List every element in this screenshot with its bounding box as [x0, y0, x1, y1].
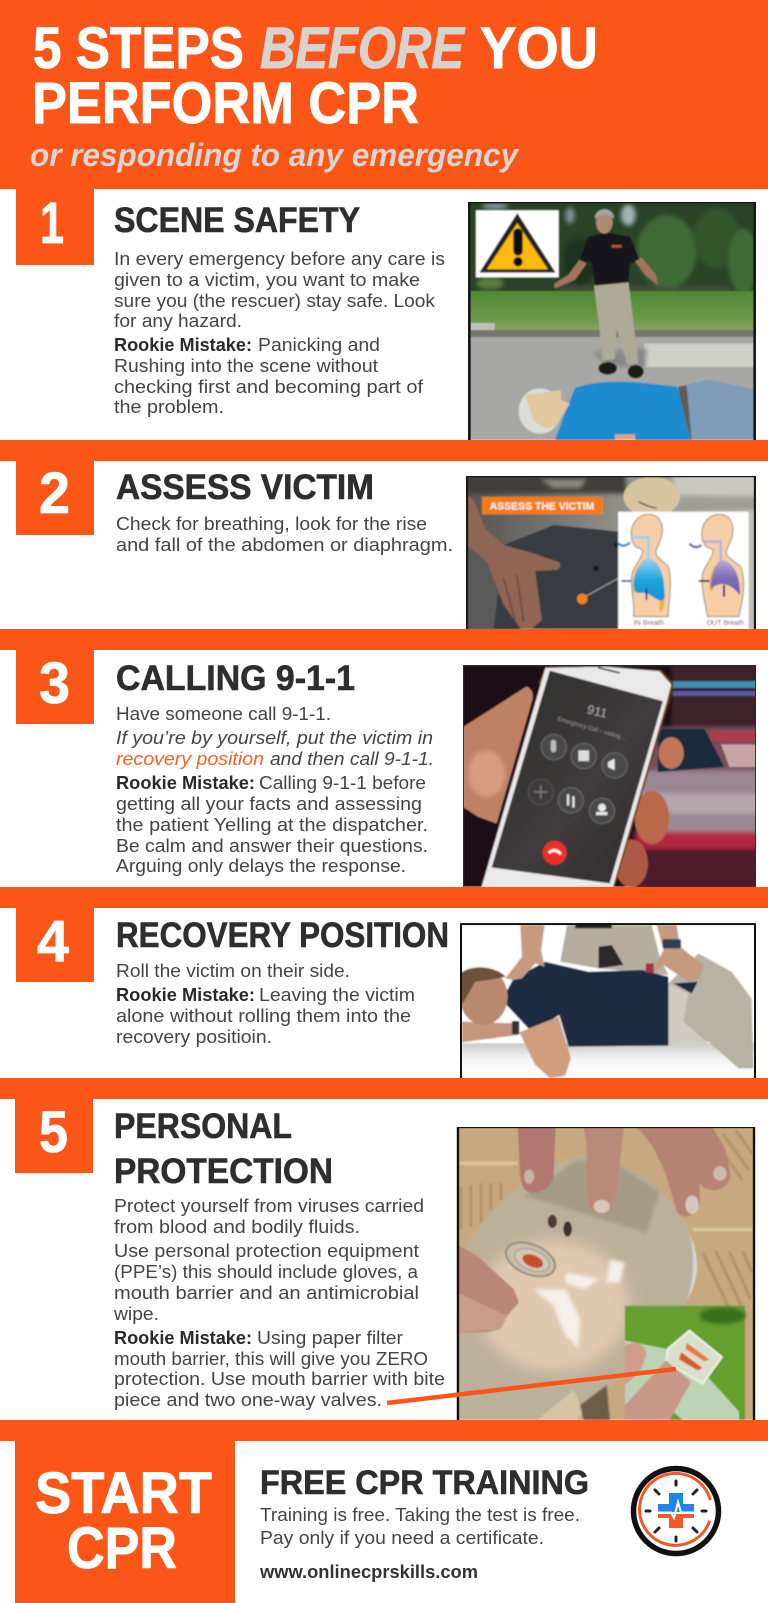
training text — [260, 1505, 580, 1548]
main title: YOU — [480, 16, 598, 81]
panel: step 3 calling 9-1-1 — [16, 650, 434, 876]
panel: step 2 assess victim — [16, 461, 453, 555]
training heading: FREE CPR TRAINING — [260, 1464, 589, 1502]
training text: Pay only if you need a certificate. — [260, 1528, 544, 1548]
panel: step 4 recovery position — [16, 908, 449, 1047]
body text: Rookie Mistake: — [116, 985, 255, 1005]
main title: BEFORE — [260, 16, 466, 81]
body text: Rookie Mistake: — [116, 773, 255, 793]
out breath diagram: OUT Breath — [707, 618, 744, 627]
rescuer — [554, 209, 658, 378]
panel: footer — [15, 1441, 718, 1603]
hand — [463, 687, 684, 887]
divider bands — [0, 440, 768, 1441]
heading — [114, 1107, 333, 1191]
body text: from blood and bodily fluids. — [114, 1217, 360, 1237]
photo: assess victim — [466, 476, 756, 629]
main title: 5 STEPS — [33, 16, 244, 81]
number badge 1: 1 — [40, 191, 64, 256]
training text: Training is free. Taking the test is free. — [260, 1505, 580, 1525]
body text: alone without rolling them into the — [116, 1006, 411, 1026]
body text: sure you (the rescuer) stay safe. Look — [114, 291, 436, 311]
number badge 3: 3 — [39, 651, 70, 716]
body text: Arguing only delays the response. — [116, 856, 406, 876]
body text: Be calm and answer their questions. — [116, 836, 428, 856]
main title: PERFORM CPR — [32, 71, 419, 136]
heading: PERSONAL — [114, 1107, 292, 1146]
photo: recovery position — [460, 923, 756, 1078]
body text: Rookie Mistake: — [114, 1328, 252, 1348]
number badge 2: 2 — [39, 461, 70, 526]
body text: Rushing into the scene without — [114, 356, 378, 376]
body text: Using paper filter — [257, 1328, 403, 1348]
body text — [114, 249, 445, 417]
body text: the problem. — [114, 397, 224, 417]
heading: ASSESS VICTIM — [116, 468, 374, 507]
number badge 4: 4 — [37, 909, 69, 974]
body text: Panicking and — [258, 335, 380, 355]
inset valve photo — [625, 1306, 746, 1420]
body text: Protect yourself from viruses carried — [114, 1196, 424, 1216]
body text — [116, 961, 415, 1047]
body text: Roll the victim on their side. — [116, 961, 350, 981]
body text: Rookie Mistake: — [114, 335, 252, 355]
in breath diagram — [618, 514, 670, 627]
phone — [482, 667, 674, 887]
heading: PROTECTION — [114, 1152, 333, 1191]
header banner — [0, 0, 768, 189]
body text: checking first and becoming part of — [114, 377, 424, 397]
photo: assess victim: ASSESS THE VICTIM — [490, 501, 594, 512]
website url: www.onlinecprskills.com — [259, 1562, 478, 1582]
body text: wipe. — [113, 1304, 159, 1324]
body text: the patient Yelling at the dispatcher. — [116, 815, 428, 835]
number badge 5 — [15, 1099, 93, 1173]
body text: Calling 9-1-1 before — [259, 773, 426, 793]
body text: Use personal protection equipment — [114, 1241, 419, 1261]
heading: RECOVERY POSITION — [116, 916, 449, 955]
body text: Check for breathing, look for the rise — [116, 514, 427, 534]
body text: Have someone call 9-1-1. — [116, 704, 331, 724]
body text: and fall of the abdomen or diaphragm. — [116, 535, 453, 555]
photo: scene safety — [468, 202, 756, 440]
panel: step 5 personal protection — [15, 1099, 445, 1410]
body text: given to a victim, you want to make — [114, 270, 420, 290]
mannequin — [519, 379, 756, 440]
in breath diagram: IN Breath — [633, 618, 664, 627]
body text — [116, 704, 434, 876]
panel: step 1 scene safety — [16, 189, 445, 417]
heading: CALLING 9-1-1 — [116, 659, 355, 698]
body text: mouth barrier, this will give you ZERO — [114, 1349, 428, 1369]
start cpr box — [15, 1441, 235, 1603]
body text: recovery positioin. — [116, 1027, 272, 1047]
number badge 1 — [16, 189, 94, 265]
body text: Leaving the victim — [259, 985, 415, 1005]
body text: mouth barrier and an antimicrobial — [114, 1283, 419, 1303]
body text: recovery position — [116, 749, 264, 769]
body text: piece and two one-way valves. — [114, 1390, 382, 1410]
phone: Emergency Call – calling… — [557, 717, 627, 742]
body text: In every emergency before any care is — [114, 249, 445, 269]
warning sign — [476, 210, 559, 277]
body text — [116, 514, 453, 555]
body text: getting all your facts and assessing — [116, 794, 422, 814]
out breath diagram — [689, 514, 744, 627]
body text — [113, 1196, 445, 1410]
start cpr box: CPR — [67, 1516, 177, 1581]
photo: phone calling 911 — [463, 665, 756, 887]
body text: If you’re by yourself, put the victim in — [116, 728, 433, 748]
subtitle: or responding to any emergency — [30, 137, 520, 173]
number badge 2 — [16, 461, 94, 535]
number badge 5: 5 — [39, 1100, 68, 1165]
body text: and then call 9-1-1. — [270, 749, 434, 769]
number badge 3 — [16, 650, 94, 724]
arrow: valve callout line — [387, 1369, 676, 1403]
main title — [32, 16, 598, 136]
heading: SCENE SAFETY — [114, 201, 360, 240]
number badge 4 — [16, 908, 94, 982]
body text: for any hazard. — [114, 311, 242, 331]
icon: logo clock with medical cross — [634, 1468, 718, 1554]
photo: mouth barrier — [456, 1127, 756, 1420]
phone: 911 — [586, 702, 609, 721]
body text: (PPE’s) this should include gloves, a — [114, 1262, 419, 1282]
valve — [501, 1236, 560, 1283]
fingers — [457, 1127, 731, 1332]
body text: protection. Use mouth barrier with bite — [114, 1369, 445, 1389]
start cpr box: START — [35, 1461, 212, 1526]
